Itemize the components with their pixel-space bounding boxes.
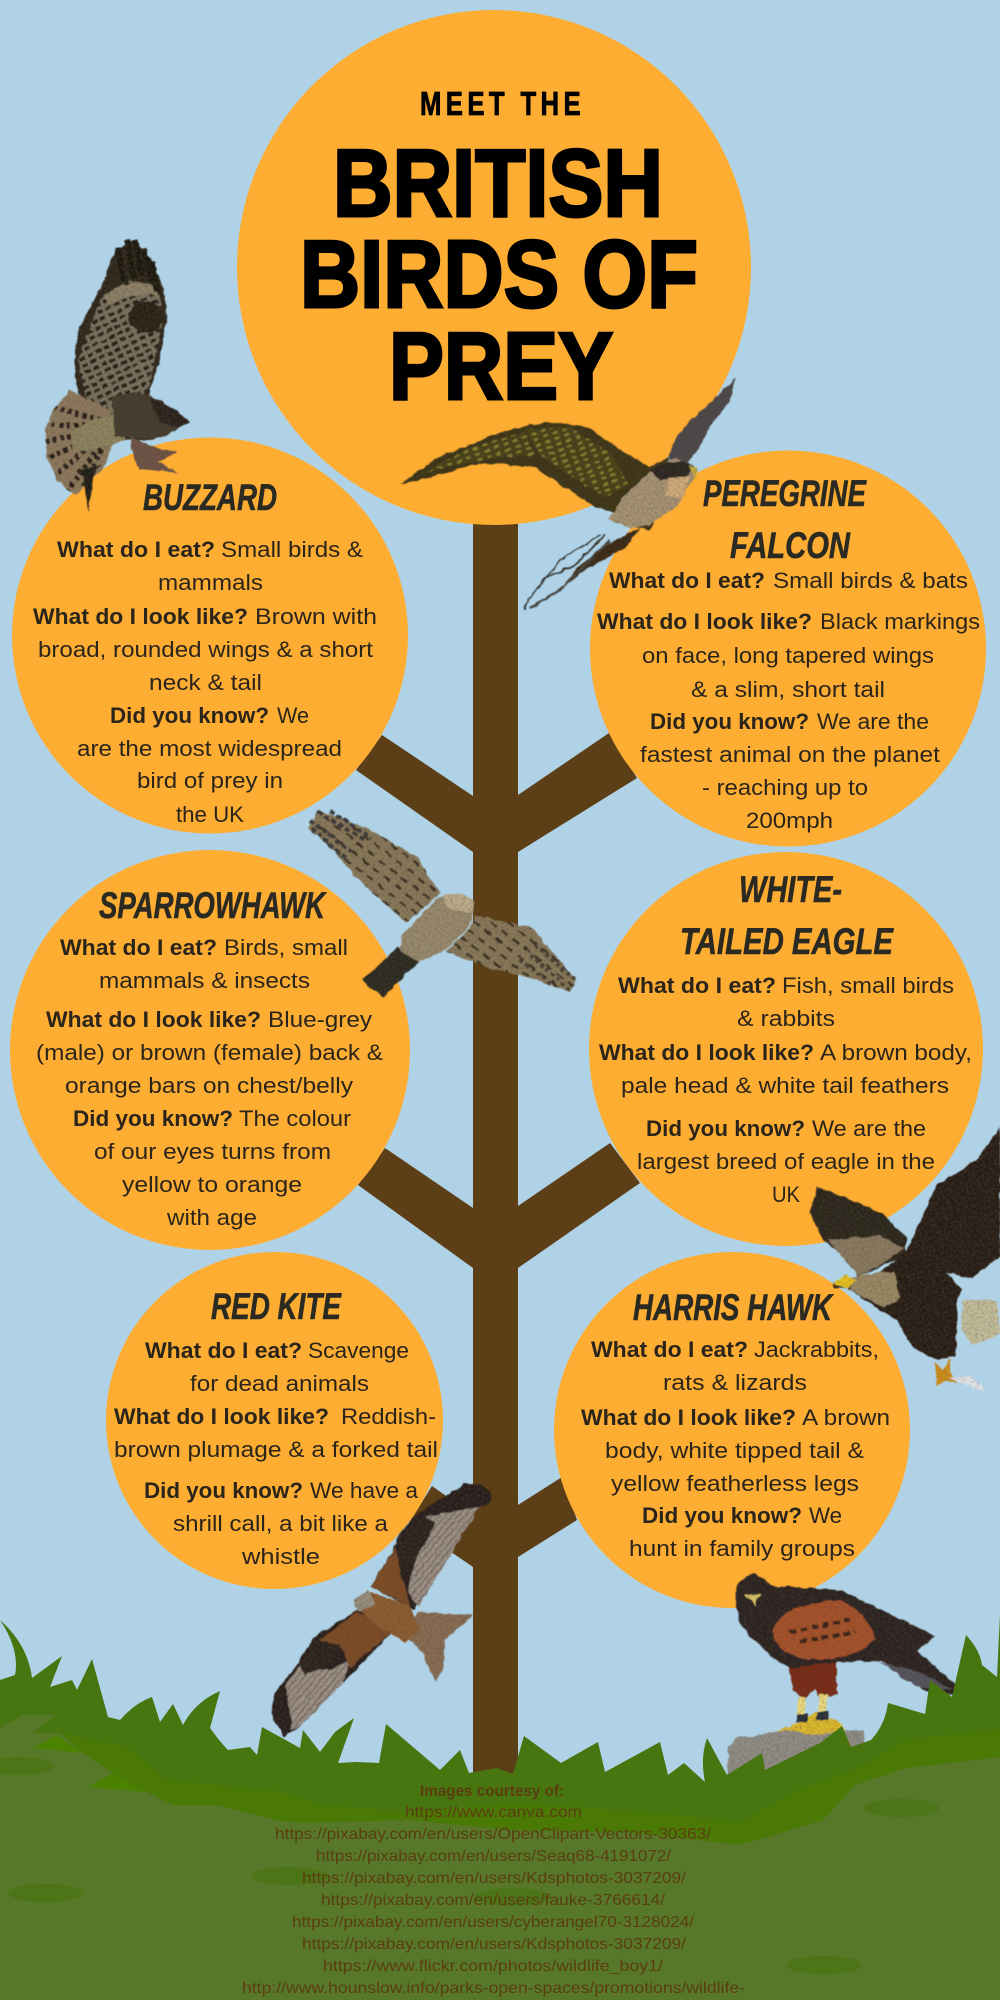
text block: peregrine facts: fastest animal on the planet [640,742,940,767]
text block: sparrowhawk facts: What do I eat? [60,935,217,960]
text block: red kite facts: What do I eat? [145,1338,302,1363]
text block: harris hawk facts: What do I look like? [581,1405,796,1430]
text block: image credits: https://pixabay.com/en/users/Seaq68-4191072/ [316,1848,672,1865]
text block: red kite facts: Did you know? [144,1478,303,1503]
text block: image credits: https://pixabay.com/en/users/Kdsphotos-3037209/ [302,1936,687,1953]
text block: sparrowhawk facts: Did you know? [73,1106,233,1131]
heading: harris hawk: HARRIS HAWK [633,1287,834,1328]
text block: image credits: https://www.canva.com [405,1804,582,1821]
text block: eagle facts: Did you know? [646,1116,805,1141]
icon: sparrowhawk bird [308,810,576,997]
text block: eagle facts [599,973,972,1207]
text block: peregrine facts: What do I look like? [597,609,812,634]
heading: sparrowhawk: SPARROWHAWK [99,885,327,926]
text block: peregrine facts: - reaching up to [702,775,868,800]
text block: sparrowhawk facts: with age [166,1205,257,1230]
text block: buzzard facts: are the most widespread [77,736,342,761]
icon: red kite bird [271,1483,491,1737]
panel: white-tailed eagle [589,852,983,1246]
text block: harris hawk facts: rats & lizards [663,1370,807,1395]
text block: peregrine facts [597,568,980,833]
text block: harris hawk facts: What do I eat? [591,1337,748,1362]
text block: image credits: https://www.flickr.com/photos/wildlife_boy1/ [323,1958,664,1975]
text block: buzzard facts: the UK [176,802,244,827]
text block: sparrowhawk facts: The colour [239,1106,351,1131]
text block: red kite facts: What do I look like? [114,1404,329,1429]
text block: sparrowhawk facts [36,935,383,1230]
heading: white-tailed eagle: WHITE- [739,869,842,910]
text block: sparrowhawk facts: Blue-grey [268,1007,372,1032]
text block: image credits: https://pixabay.com/en/users/OpenClipart-Vectors-30363/ [275,1826,712,1843]
text block: peregrine facts: on face, long tapered wings [642,643,934,668]
heading: british birds of prey: BIRDS OF [300,221,698,328]
grass band [60,1729,1000,1845]
heading: peregrine falcon: FALCON [730,525,851,566]
panel: peregrine falcon [590,450,986,846]
text block: image credits: https://pixabay.com/en/users/fauke-3766614/ [321,1892,666,1909]
text block: harris hawk facts: yellow featherless legs [611,1471,859,1496]
panel: red kite [106,1252,443,1589]
heading: buzzard: BUZZARD [143,477,277,518]
text block: image credits: http://www.hounslow.info/parks-open-spaces/promotions/wildlife- [242,1980,745,1997]
text block: red kite facts: whistle [241,1544,320,1569]
text block: eagle facts: UK [772,1182,800,1207]
text block: eagle facts: What do I eat? [618,973,776,998]
heading: british birds of prey: PREY [389,313,613,420]
text block: buzzard facts: bird of prey in [137,768,283,793]
text block: sparrowhawk facts: mammals & insects [99,968,310,993]
text block: sparrowhawk facts: (male) or brown (female) back & [36,1040,383,1065]
text block: peregrine facts: & a slim, short tail [691,677,885,702]
text block: red kite facts: Reddish- [341,1404,436,1429]
icon: buzzard bird [45,240,190,512]
text block: harris hawk facts: We [809,1503,842,1528]
spots [0,1757,939,1974]
text block: peregrine facts: Black markings [820,609,980,634]
icon: peregrine falcon bird [400,378,736,610]
text block: red kite facts [114,1338,438,1569]
ground: grass [0,1615,1000,2000]
text block: peregrine facts: Did you know? [650,709,809,734]
text block: sparrowhawk facts: Birds, small [224,935,348,960]
heading: peregrine falcon [703,473,867,566]
text block: peregrine facts: We are the [817,709,929,734]
text block: red kite facts: brown plumage & a forked tail [114,1437,438,1462]
text block: buzzard facts: What do I eat? [57,537,215,562]
text block: buzzard facts: We [277,703,309,728]
text block: buzzard facts: broad, rounded wings & a short [38,637,373,662]
text block: harris hawk facts: Jackrabbits, [754,1337,879,1362]
text block: red kite facts: We have a [310,1478,419,1503]
heading: meet the: MEET THE [420,86,581,123]
text block: buzzard facts: What do I look like? [33,604,248,629]
text block: buzzard facts: neck & tail [149,670,262,695]
text block: sparrowhawk facts: What do I look like? [46,1007,261,1032]
text block: harris hawk facts: A brown [802,1405,890,1430]
text block: eagle facts: Fish, small birds [782,973,954,998]
heading: british birds of prey: BRITISH [333,130,663,237]
text block: buzzard facts [33,537,377,827]
text block: image credits: https://pixabay.com/en/users/Kdsphotos-3037209/ [302,1870,687,1887]
text block: harris hawk facts: hunt in family groups [629,1536,855,1561]
text block: image credits: https://pixabay.com/en/users/cyberangel70-3128024/ [292,1914,695,1931]
heading: white-tailed eagle: TAILED EAGLE [680,921,894,962]
text block: eagle facts: We are the [812,1116,926,1141]
text block: red kite facts: Scavenge [308,1338,409,1363]
text block: image credits [242,1783,745,1997]
heading: british birds of prey [300,130,698,420]
text block: red kite facts: shrill call, a bit like a [173,1511,389,1536]
text block: eagle facts: A brown body, [820,1040,972,1065]
icon: white-tailed eagle bird [810,1127,1000,1392]
text block: sparrowhawk facts: yellow to orange [122,1172,302,1197]
panel: title circle [237,10,751,525]
heading: white-tailed eagle [680,869,894,962]
post [728,1728,865,1775]
text block: eagle facts: largest breed of eagle in the [637,1149,935,1174]
panel: sparrowhawk [10,850,410,1250]
text block: eagle facts: What do I look like? [599,1040,814,1065]
heading: peregrine falcon: PEREGRINE [703,473,867,514]
icon: harris hawk bird on post [728,1574,958,1775]
text block: sparrowhawk facts: orange bars on chest/belly [65,1073,353,1098]
heading: red kite: RED KITE [211,1286,342,1327]
text block: harris hawk facts: Did you know? [642,1503,802,1528]
text block: red kite facts: for dead animals [190,1371,369,1396]
text block: buzzard facts: Did you know? [110,703,269,728]
text block: eagle facts: & rabbits [737,1006,835,1031]
text block: image credits: Images courtesy of: [420,1783,564,1800]
lower meadow [0,1715,1000,2000]
panel: buzzard [12,438,408,834]
text block: eagle facts: pale head & white tail feathers [621,1073,949,1098]
text block: peregrine facts: What do I eat? [609,568,765,593]
text block: harris hawk facts: body, white tipped tail & [605,1438,864,1463]
text block: harris hawk facts [581,1337,890,1561]
tree trunk and branches [356,520,640,1776]
text block: peregrine facts: 200mph [746,808,833,833]
text block: peregrine facts: Small birds & bats [773,568,968,593]
panel: harris hawk [554,1252,910,1608]
text block: buzzard facts: Brown with [255,604,377,629]
text block: sparrowhawk facts: of our eyes turns from [94,1139,331,1164]
text block: buzzard facts: mammals [158,570,263,595]
text block: buzzard facts: Small birds & [221,537,363,562]
